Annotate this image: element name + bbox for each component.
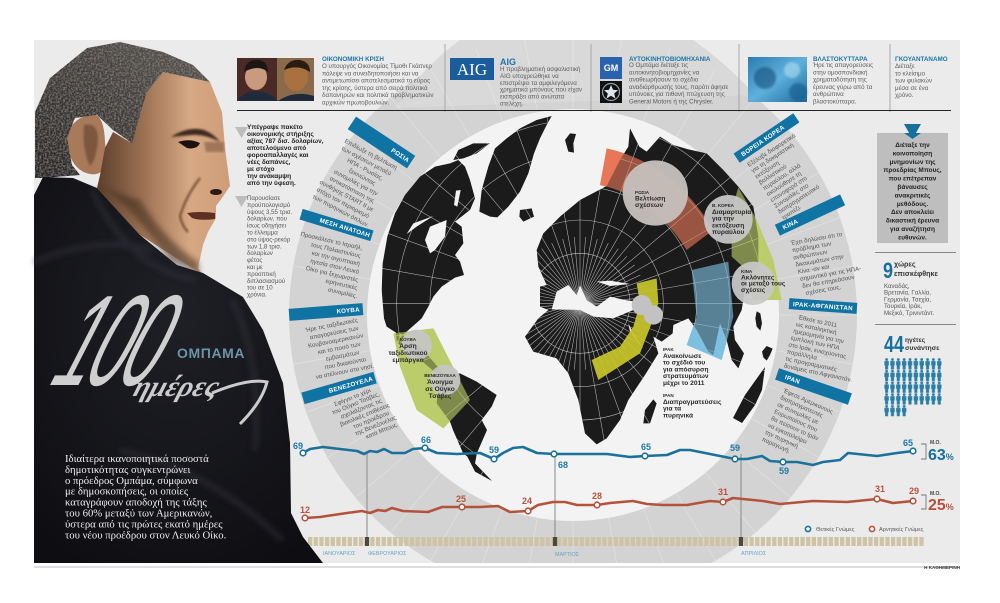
left notes column: προοπτική — [247, 271, 276, 278]
right column: memo box: ευθυνών. — [898, 234, 927, 241]
ear — [67, 115, 106, 174]
Guantanamo item: μέσα σε ένα — [895, 85, 929, 92]
intro paragraph: του νέου προέδρου στον Λευκό Οίκο. — [65, 529, 226, 541]
car industry item: υπόνοιες για πιθανή πτώχευση της — [629, 91, 725, 98]
hair — [35, 42, 210, 178]
average approval 63% — [921, 440, 954, 464]
right column: memo box: ανακριτικές — [895, 192, 931, 199]
stat: 9 countries: Καναδάς, — [884, 283, 910, 290]
label: China: ΚΙΝΑ — [741, 269, 752, 274]
label: China: οι μεταξύ τους — [741, 281, 786, 288]
ring panel: Middle East: Οίκο για ξεχωριστές — [305, 265, 359, 284]
right column: memo box: Δεν αποκλείει — [891, 208, 934, 216]
ring panel: Russia: συνομιλίες για την — [333, 168, 379, 197]
title: handwritten 100: 100 — [31, 268, 206, 413]
left notes column: στο ύψος-ρεκόρ — [247, 236, 291, 243]
left notes column: με στόχο — [247, 166, 274, 173]
economic crisis item: Ο υπουργός Οικονομίας Τίμοθι Γκάιτνερ — [322, 63, 432, 70]
car industry item: GM — [604, 63, 618, 73]
label: North Korea: πυραύλου — [712, 228, 744, 236]
average approval 63%: 63% — [928, 447, 954, 464]
ring panel: Iraq and Afghanistan: ημερομηνία για την — [793, 328, 844, 345]
ring panel: Middle East: ηγεσία στον Λευκό — [310, 258, 360, 276]
ring panel: Venezuela: του Ούγκο Τσάβες, — [331, 391, 381, 417]
stat: 9 countries: επισκέφθηκε — [894, 269, 939, 278]
label: Iraq: στρατευμάτων — [663, 373, 709, 380]
left notes column: προϋπολογισμό — [247, 202, 291, 209]
ring panel: Venezuela: Σφίγγει το χέρι — [333, 387, 372, 408]
map grid — [382, 117, 764, 475]
label: Venezuela: Άνοιγμα — [427, 379, 453, 386]
stat: 9 countries: Τουρκία, Ιράκ, — [884, 303, 922, 310]
left notes column: Παρουσίασε — [247, 195, 280, 202]
yellow Iraq band — [592, 278, 658, 380]
left notes column: του σε 10 — [247, 285, 273, 292]
ring panel: Cuba: απαγορεύσεις των — [309, 325, 359, 341]
AIG item: AIG — [500, 57, 516, 67]
intro paragraph: του 60% μεταξύ των Αμερικανών, — [65, 508, 212, 520]
left notes column — [235, 124, 324, 299]
line chart: approval: 59 — [730, 443, 740, 453]
car industry item: ΑΥΤΟΚΙΝΗΤΟΒΙΟΜΗΧΑΝΙΑ — [629, 56, 711, 63]
right column: memo box: που επέτρεπαν — [889, 176, 937, 183]
ring panel: Middle East: ΜΕΣΗ ΑΝΑΤΟΛΗ — [319, 217, 371, 239]
subtitle: ΟΜΠΑΜΑ — [177, 345, 245, 361]
people pictogram — [884, 358, 942, 416]
ring panel: Iraq and Afghanistan: τις προγραμματικές — [785, 356, 838, 373]
label: Cuba: Άρση — [399, 343, 417, 350]
ring panel: Cuba: ΚΟΥΒΑ — [336, 307, 360, 315]
Guantanamo item: των φυλακών — [895, 78, 932, 85]
right column: memo box: Διέταξε την — [895, 142, 930, 149]
world map — [382, 116, 782, 481]
left notes column: των 1,8 τρισ. — [247, 243, 282, 250]
car industry item: αυτοκινητοβιομηχανίες να — [629, 69, 700, 76]
AIG item: εισπράξει από ανώτατα — [500, 94, 565, 101]
ring panel: Venezuela: σχολιάζοντας τις — [340, 398, 383, 421]
ring panel: Venezuela: του προέδρου — [352, 410, 391, 431]
title: handwritten days — [130, 371, 267, 424]
average approval 63%: Μ.Ο. — [930, 440, 941, 446]
ring panel: Middle East: ειρηνευτικές — [325, 278, 358, 292]
circle: China — [732, 262, 775, 305]
ring panel: Venezuela — [301, 372, 400, 449]
Guantanamo item: ΓΚΟΥΑΝΤΑΝΑΜΟ — [895, 56, 948, 63]
left notes column: χρόνια. — [247, 292, 267, 299]
ring panel: North Korea: ακολούθησε τη — [765, 170, 803, 198]
chart legend — [805, 526, 924, 533]
ring panel: China — [775, 194, 864, 298]
ring panel: Venezuela: κατά Μπους. — [365, 421, 400, 441]
ring panel: Cuba: που δικαιούνται — [324, 356, 367, 371]
right column: memo box — [877, 124, 948, 243]
AIG item: επιστρέψει τα αμφιλεγόμενα — [500, 80, 577, 87]
stem cells item: χρηματοδότηση της — [813, 77, 867, 84]
left notes column: δολαρίων, που — [247, 216, 288, 223]
ring panel: Iraq and Afghanistan: εμπλοκή των ΗΠΑ — [790, 335, 841, 352]
line chart: disapproval: 31 — [718, 487, 728, 497]
ring panel: Iran — [760, 368, 852, 464]
line chart: disapproval: 28 — [592, 491, 602, 501]
left notes column: και με — [247, 264, 263, 271]
intro paragraph: καταγράφουν αποδοχή της τάξης — [65, 497, 208, 509]
ring panel: North Korea: Συνομιλίες στο — [773, 182, 811, 210]
timeline: month ticks: ΙΑΝΟΥΑΡΙΟΣ — [323, 551, 356, 557]
stat: 9 countries — [875, 252, 956, 317]
colour bands under land — [393, 148, 782, 428]
right column: memo box: προεδρίας Μπους, — [883, 167, 942, 174]
stem cells item: ΒΛΑΣΤΟΚΥΤΤΑΡΑ — [813, 56, 868, 63]
chart legend: Αρνητικές Γνώμες — [879, 526, 924, 533]
stem cells item: έρευνας γύρω από τα — [813, 84, 873, 91]
ring panel: Iran: Έφεσε Αμερικανούς — [782, 387, 834, 416]
label: Iran: για τα — [663, 406, 681, 413]
economic crisis item: αντιμετωπίσει αποτελεσματικά το εύρος — [322, 78, 430, 85]
AIG item: χρηματικά μπόνους που είχαν — [500, 87, 582, 94]
ring panel: Iraq and Afghanistan: δυνάμεις στο Αφγανιστάν. — [783, 363, 853, 384]
stat: 44 leaders — [875, 324, 956, 416]
label: Russia: Βελτίωση — [635, 195, 665, 203]
economic crisis item: δαπανηρών και πολιτικά προβληματικών — [322, 92, 434, 99]
car industry item: General Motors ή της Chrysler. — [629, 98, 714, 106]
right column: memo box: μεθόδους. — [897, 201, 928, 208]
stem cells item: ανθρώπινα — [813, 91, 844, 98]
intro paragraph: ύστερα από τις πρώτες εκατό ημέρες — [65, 518, 223, 530]
stem cells item: Ήρε τις απαγορεύσεις — [813, 62, 873, 69]
ring panel: Iraq and Afghanistan: ως καταληκτική — [795, 321, 837, 336]
label: Iran: πυρηνικά — [663, 412, 693, 419]
left notes column: ύψους 3,55 τρισ. — [247, 209, 293, 216]
label: Cuba: ΚΟΥΒΑ — [400, 337, 416, 342]
car industry item — [600, 56, 729, 106]
ring panel: China: ανθρώπινων — [793, 249, 828, 262]
stat: 9 countries: Βρετανία, Γαλλία, — [884, 290, 931, 297]
left notes column: από την ύφεση. — [247, 180, 296, 187]
line chart: disapproval: 12 — [300, 505, 310, 515]
ring panel: China: δεν θα επηρεάσουν — [802, 274, 855, 290]
label: North Korea: εκτόξευση — [712, 222, 744, 229]
label: Iraq: το σχέδιό του — [663, 360, 705, 367]
facial features — [84, 125, 224, 274]
label: Iraq: μέχρι το 2011 — [663, 380, 705, 387]
label: Russia: σχέσεων — [635, 202, 663, 209]
ring panel: Iran: παραγωγή. — [761, 436, 792, 455]
ring panel: Venezuela: της Βενεζουέλας — [354, 414, 398, 437]
ring panel: North Korea: Εξέλαβε διαφορετικά — [746, 132, 797, 169]
Guantanamo item: Διέταξε — [895, 63, 915, 70]
Guantanamo item: το κλείσιμο — [895, 70, 926, 77]
line chart: disapproval — [300, 484, 919, 521]
line chart: disapproval: 24 — [522, 496, 532, 506]
ring panel: North Korea: επαναφορά στο — [769, 175, 809, 204]
face — [97, 72, 230, 275]
car industry item: Ο Ομπάμα διέταξε τις — [629, 62, 688, 69]
line chart: approval — [293, 435, 916, 476]
timeline: month ticks — [308, 454, 925, 558]
ring panel: China: ΚΙΝΑ — [782, 218, 800, 231]
label: Cuba: εμπάργκο — [392, 357, 424, 364]
label: North Korea: Διαμαρτυρία — [712, 209, 751, 216]
ring panel: North Korea: τραπέζι. — [781, 204, 803, 222]
line chart: disapproval: 29 — [909, 486, 919, 496]
economic crisis item: πάλεψε να συνειδητοποιήσει και να — [322, 70, 419, 77]
ring panel: Iraq and Afghanistan: παράλληλα — [786, 348, 818, 362]
ring panel: China: σχέσεις τους. — [805, 284, 842, 297]
car industry item: αναδιάρθρωσής τους, παρότι άφησε — [629, 84, 729, 91]
ring panel: North Korea: διαπραγματευτικό — [777, 183, 821, 216]
ring panel: Russia: ΗΠΑ - Ρωσίας, — [346, 157, 385, 182]
average disapproval 25%: Μ.Ο. — [930, 491, 941, 497]
Iraq and Iran grey spots — [632, 295, 663, 325]
circular grey ring with white centre — [289, 31, 857, 599]
ring panel: Iran: θα πείσουν το Ιράν — [770, 415, 819, 442]
ring panel: Middle East: τους Παλαιστινίους — [310, 241, 361, 260]
line chart: approval: 68 — [558, 460, 568, 470]
line chart: disapproval: 31 — [875, 484, 885, 494]
AIG item: AIG υποχρεώθηκε να — [500, 73, 559, 80]
left notes column: την ανάκαμψη — [247, 173, 291, 180]
line chart: approval: 65 — [641, 442, 651, 452]
ring panel: China: Έχει δηλώσει ότι το — [790, 231, 843, 247]
ring panel: Cuba: και το ποσό των — [317, 341, 361, 356]
ring panel: Iraq and Afghanistan — [783, 298, 864, 384]
label: Iran: Διαπραγματεύσεις — [663, 399, 722, 406]
ring panel: North Korea: για τη δοκιμαστική — [750, 142, 795, 175]
circle: North Korea — [704, 195, 753, 244]
right column: memo box: για αναζήτηση — [890, 226, 935, 233]
label: Venezuela: ΒΕΝΕΖΟΥΕΛΑ — [424, 373, 456, 378]
ring panel: Russia — [311, 117, 415, 229]
left notes column: νέες δαπάνες, — [247, 159, 291, 166]
left notes column: το έλλειμμα — [247, 230, 278, 236]
ring panel: Cuba: εμβασμάτων — [325, 349, 360, 363]
left notes column: αποτελούμενο από — [247, 144, 306, 152]
label: Venezuela: Τσάβες — [429, 393, 452, 400]
left notes column: ίσως οδηγήσει — [247, 223, 287, 230]
line chart: approval: 59 — [779, 466, 789, 476]
AIG item: AIG — [457, 60, 487, 79]
ring panel: Cuba: Κουβανοαμερικανών — [308, 332, 364, 350]
circle: Russia — [623, 160, 688, 226]
AIG item: στελέχη. — [500, 100, 524, 108]
ring panel: North Korea — [734, 113, 832, 222]
ring panel: Iran: την πυρηνική — [764, 429, 799, 450]
ring panel: Cuba: Ήρε τις ταξιδιωτικές — [305, 317, 358, 334]
stem cells item — [748, 56, 873, 106]
average disapproval 25% — [921, 491, 954, 514]
ring panel: Iran: ΙΡΑΝ — [784, 374, 801, 386]
chart legend: Θετικές Γνώμες — [816, 526, 855, 533]
label: Venezuela: σε Ούγκο — [425, 386, 455, 393]
left notes column: φοροαπαλλαγές και — [247, 151, 309, 159]
ring panel: North Korea: πυραύλου, αλλά — [762, 162, 803, 192]
ring panel: Iran: Ευρωπαίους που — [773, 408, 819, 434]
right column: memo box: κοινοποίηση — [893, 150, 932, 157]
car industry item: αναθεωρήσουν το σχέδιο — [629, 77, 699, 84]
timeline: month ticks: ΦΕΒΡΟΥΑΡΙΟΣ — [368, 551, 407, 557]
intro paragraph: με δημοσκοπήσεις, οι οποίες — [65, 486, 189, 498]
economic crisis item: ΟΙΚΟΝΟΜΙΚΗ ΚΡΙΣΗ — [322, 56, 384, 63]
left notes column: φέτος — [247, 257, 262, 264]
intro paragraph: ο πρόεδρος Ομπάμα, σύμφωνα — [65, 475, 198, 487]
Guantanamo item: χρόνο. — [895, 92, 914, 99]
AIG item — [450, 57, 582, 108]
ring panel: Middle East: και την αιγυπτιακή — [311, 250, 360, 268]
ring panel: Russia: αντικατάσταση της — [328, 175, 376, 205]
economic crisis item: αρχικών πρωτοβουλιών. — [322, 100, 389, 106]
line chart: disapproval: 25 — [456, 494, 466, 504]
circle: Venezuela — [430, 365, 460, 395]
ring panel: Russia: των πυρηνικών όπλων. — [311, 193, 370, 229]
left notes column: διπλασιασμού — [247, 278, 286, 285]
left notes column: αξίας 787 δισ. δολαρίων, — [247, 137, 324, 145]
circle: Cuba — [401, 330, 432, 360]
ring panel: Iraq and Afghanistan: Έθεσε το 2011 — [798, 314, 838, 329]
right column: memo box: μνημονίων της — [889, 159, 936, 166]
ring panel: China: σημαντικό για τις ΗΠΑ- — [800, 265, 862, 283]
continents — [380, 110, 793, 487]
ring panel: Venezuela: βιαιολικές επιθέσεις — [339, 402, 391, 428]
ring panel: Venezuela: ΒΕΝΕΖΟΥΕΛΑ — [328, 376, 374, 395]
line chart: approval: 59 — [489, 445, 499, 455]
ring panel: Russia: Επιδίωξε τη βελτίωση — [343, 138, 398, 172]
ring panel: Cuba: να στέλνουν στο νησί. — [315, 363, 375, 381]
timeline: month ticks: ΜΑΡΤΙΟΣ — [555, 552, 580, 558]
label: Iran: ΙΡΑΝ — [663, 393, 674, 398]
ring panel: North Korea: βαλλιστικού — [758, 163, 789, 186]
stem cells item: βλαστοκύτταρα. — [813, 98, 857, 106]
map labels — [389, 190, 786, 419]
economic crisis item — [237, 56, 434, 106]
stat: 9 countries: Γερμανία, Τσεχία, — [884, 296, 931, 303]
ring panel: Cuba — [289, 303, 375, 381]
left notes column: δολαρίων — [247, 250, 273, 257]
ring panel: Middle East: Προσκάλεσε το Ισραήλ, — [300, 231, 363, 252]
ring panel: Iraq and Afghanistan: ΙΡΑΚ-ΑΦΓΑΝΙΣΤΑΝ — [793, 301, 853, 312]
ring panel: Russia: των σχέσεων μεταξύ — [340, 145, 393, 178]
ring panel: Russia: στόχο τον περιορισμό — [315, 186, 371, 220]
stat: 9 countries: 9 — [883, 258, 893, 283]
intro paragraph: Ιδιαίτερα ικανοποιητικά ποσοστά — [65, 453, 209, 465]
AIG item: Η προβληματική ασφαλιστική — [500, 66, 580, 73]
ring panel: Russia: συνθήκης START II με — [318, 179, 375, 213]
label: Iraq: για απόσυρση — [663, 366, 708, 373]
label: North Korea: Β. ΚΟΡΕΑ — [712, 203, 734, 208]
right column: memo box: βάναυσες — [897, 184, 928, 191]
timeline: month ticks: ΑΠΡΙΛΙΟΣ — [741, 551, 767, 557]
title: handwritten days: ημέρες — [130, 371, 224, 403]
ring panel: Russia: ξεκινώντας — [347, 167, 377, 187]
dark coat — [34, 177, 323, 563]
header: news strip — [237, 44, 951, 112]
ring panel: Iran: σε συνομιλίες με — [776, 401, 820, 426]
left notes column: Υπέγραψε πακέτο — [247, 124, 303, 131]
stat: 44 leaders: ηγέτες — [905, 337, 925, 344]
ring panel: Middle East: συνομιλίες. — [327, 286, 358, 300]
average disapproval 25%: 25% — [928, 497, 954, 514]
ring panel: China: Κίνα -αν και — [797, 263, 830, 276]
photo: Obama profile — [34, 42, 323, 563]
label: Iraq: ΙΡΑΚ — [663, 347, 674, 352]
left notes column: οικονομικής στήριξης — [247, 131, 314, 138]
label: North Korea: για την — [712, 216, 734, 223]
ring panel: Middle East — [289, 209, 373, 300]
source credit: Η ΚΑΘΗΜΕΡΙΝΗ — [924, 565, 961, 570]
intro paragraph: δημοτικότητας συγκεντρώνει — [65, 464, 191, 476]
ring panel: Russia: ΡΩΣΙΑ — [390, 147, 411, 164]
ring panel: China: πρόβλημα των — [791, 240, 832, 254]
label: Cuba: ταξιδιωτικού — [389, 350, 428, 357]
line chart: approval: 66 — [421, 435, 431, 445]
label: Russia: ΡΩΣΙΑ — [635, 190, 649, 195]
ring panel: Iraq and Afghanistan: στο Ιράκ, ενισχύοντας — [788, 341, 847, 361]
line chart: approval: 65 — [903, 438, 913, 448]
line chart: approval: 69 — [293, 441, 303, 451]
stat: 9 countries: χώρες — [894, 260, 916, 268]
stat: 9 countries: Μεξικό, Τρινιντάντ. — [884, 310, 935, 317]
ring panel: Iran: διαπραγματευτές — [779, 394, 824, 420]
ring panel: China: δικαιωμάτων στην — [795, 253, 844, 269]
Guantanamo item — [895, 56, 948, 99]
ring panel: Iran: να εγκαταλείψει — [767, 422, 808, 446]
label: China: σχέσεις — [741, 287, 766, 294]
colour bands over land — [393, 148, 782, 428]
stat: 44 leaders: 44 — [884, 331, 904, 357]
ring panel: North Korea: ΒΟΡΕΙΑ ΚΟΡΕΑ — [740, 124, 786, 158]
stem cells item: στην ομοσπονδιακή — [813, 69, 868, 76]
label: Iraq: Ανακοίνωσε — [663, 353, 702, 360]
stat: 44 leaders: συνάντησε — [905, 345, 940, 352]
economic crisis item: της κρίσης, ύστερα από σειρά πολιτικά — [322, 85, 428, 92]
label: China: Ακλόνητες — [741, 273, 775, 281]
right column: memo box: δικαστική έρευνα — [886, 218, 939, 225]
ring panel: North Korea: εκτόξευση — [754, 160, 781, 180]
